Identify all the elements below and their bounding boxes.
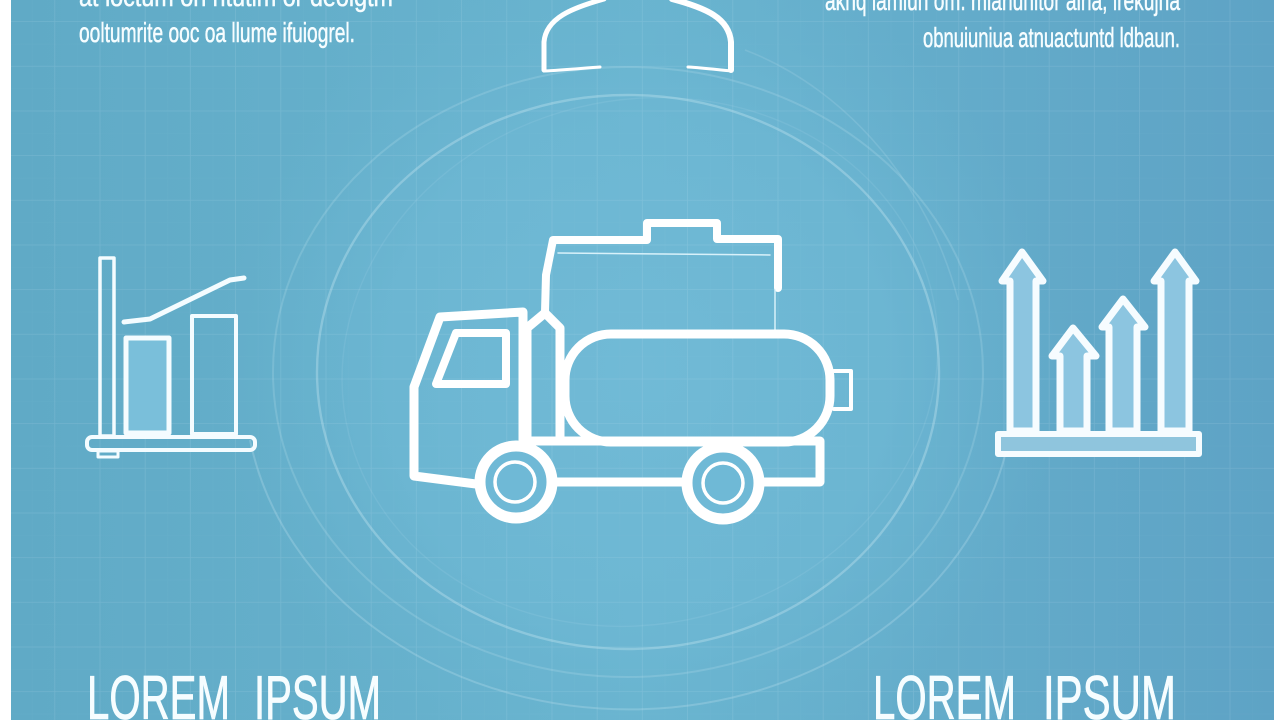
post between cab and tank xyxy=(527,313,560,440)
upper container xyxy=(545,223,778,330)
icon: bell-shaped arch at top xyxy=(544,0,732,71)
chart bar tall xyxy=(192,316,236,434)
top right text block xyxy=(825,0,1180,53)
chart post xyxy=(100,258,114,436)
chart base xyxy=(87,437,255,450)
arrow four xyxy=(1154,252,1196,431)
icon: right rising arrows chart xyxy=(998,252,1199,454)
chart bar short xyxy=(126,338,169,433)
icon: tanker truck xyxy=(414,223,851,519)
chassis xyxy=(524,441,820,482)
icon: left bar chart xyxy=(87,258,255,457)
cab outline xyxy=(414,312,523,484)
arrow three xyxy=(1102,299,1145,431)
arrow one xyxy=(1002,252,1043,431)
front wheel xyxy=(687,447,759,519)
trend line xyxy=(124,278,244,322)
sketched circles around the truck xyxy=(250,35,1012,709)
rear wheel xyxy=(480,446,552,518)
top left text block: ooltumrite ooc oa llume ifuiogrel. xyxy=(79,17,355,48)
arrows base xyxy=(998,434,1199,454)
top left text block xyxy=(79,0,393,48)
arrow two xyxy=(1052,328,1096,431)
cab window xyxy=(436,333,506,384)
tank valve xyxy=(834,371,851,409)
tank xyxy=(565,334,830,442)
